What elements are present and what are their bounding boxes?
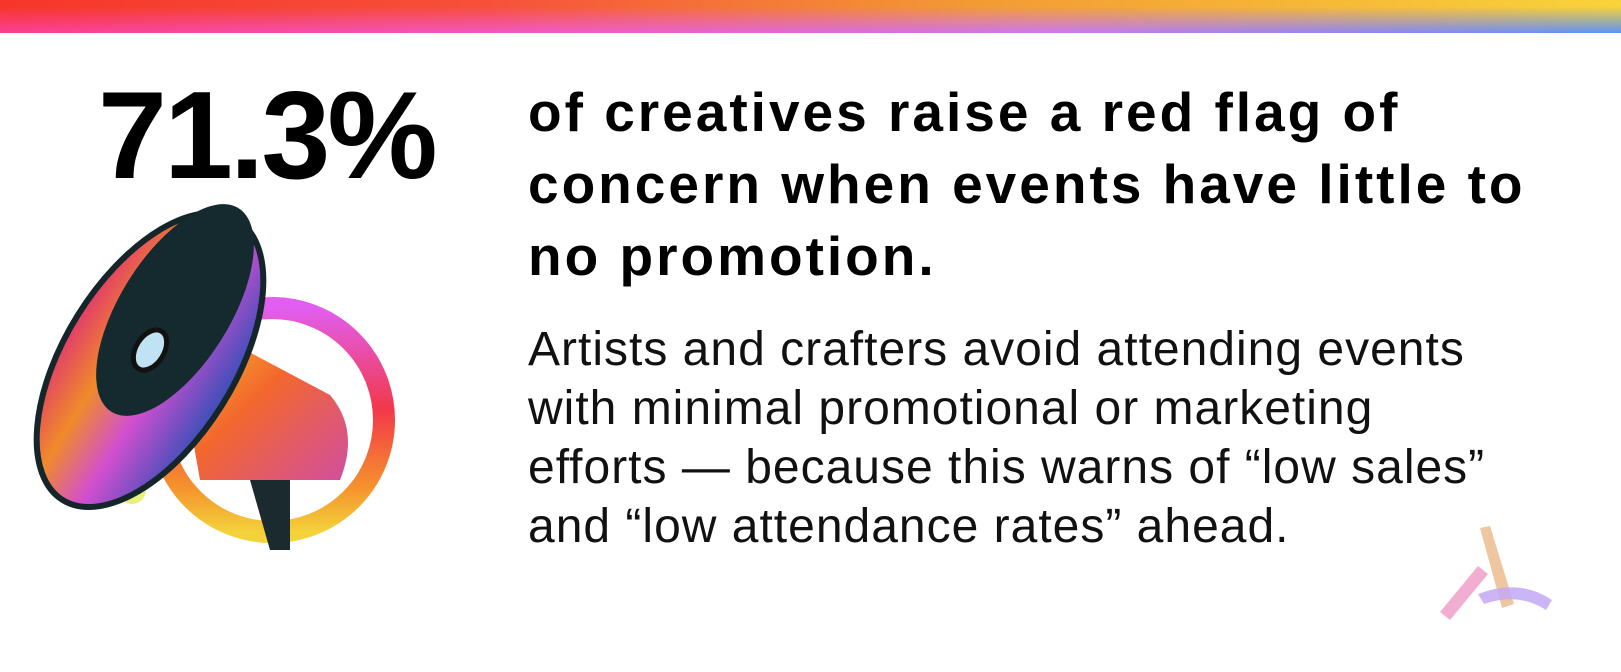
heading: concern when events have little to xyxy=(528,153,1526,215)
heading xyxy=(528,81,1526,287)
ring xyxy=(118,308,384,532)
top gradient bar xyxy=(0,0,1621,33)
heading: of creatives raise a red flag of xyxy=(528,81,1400,143)
icon: megaphone with ring xyxy=(34,204,395,550)
body text: with minimal promotional or marketing xyxy=(528,382,1373,435)
logo xyxy=(1440,526,1552,620)
body text: Artists and crafters avoid attending events xyxy=(528,323,1465,376)
big statistic: 71.3% xyxy=(98,67,435,205)
body text: efforts — because this warns of “low sales” xyxy=(528,441,1485,494)
heading: no promotion. xyxy=(528,225,937,287)
body text xyxy=(528,323,1485,553)
megaphone body xyxy=(0,175,348,550)
body text: and “low attendance rates” ahead. xyxy=(528,500,1289,553)
